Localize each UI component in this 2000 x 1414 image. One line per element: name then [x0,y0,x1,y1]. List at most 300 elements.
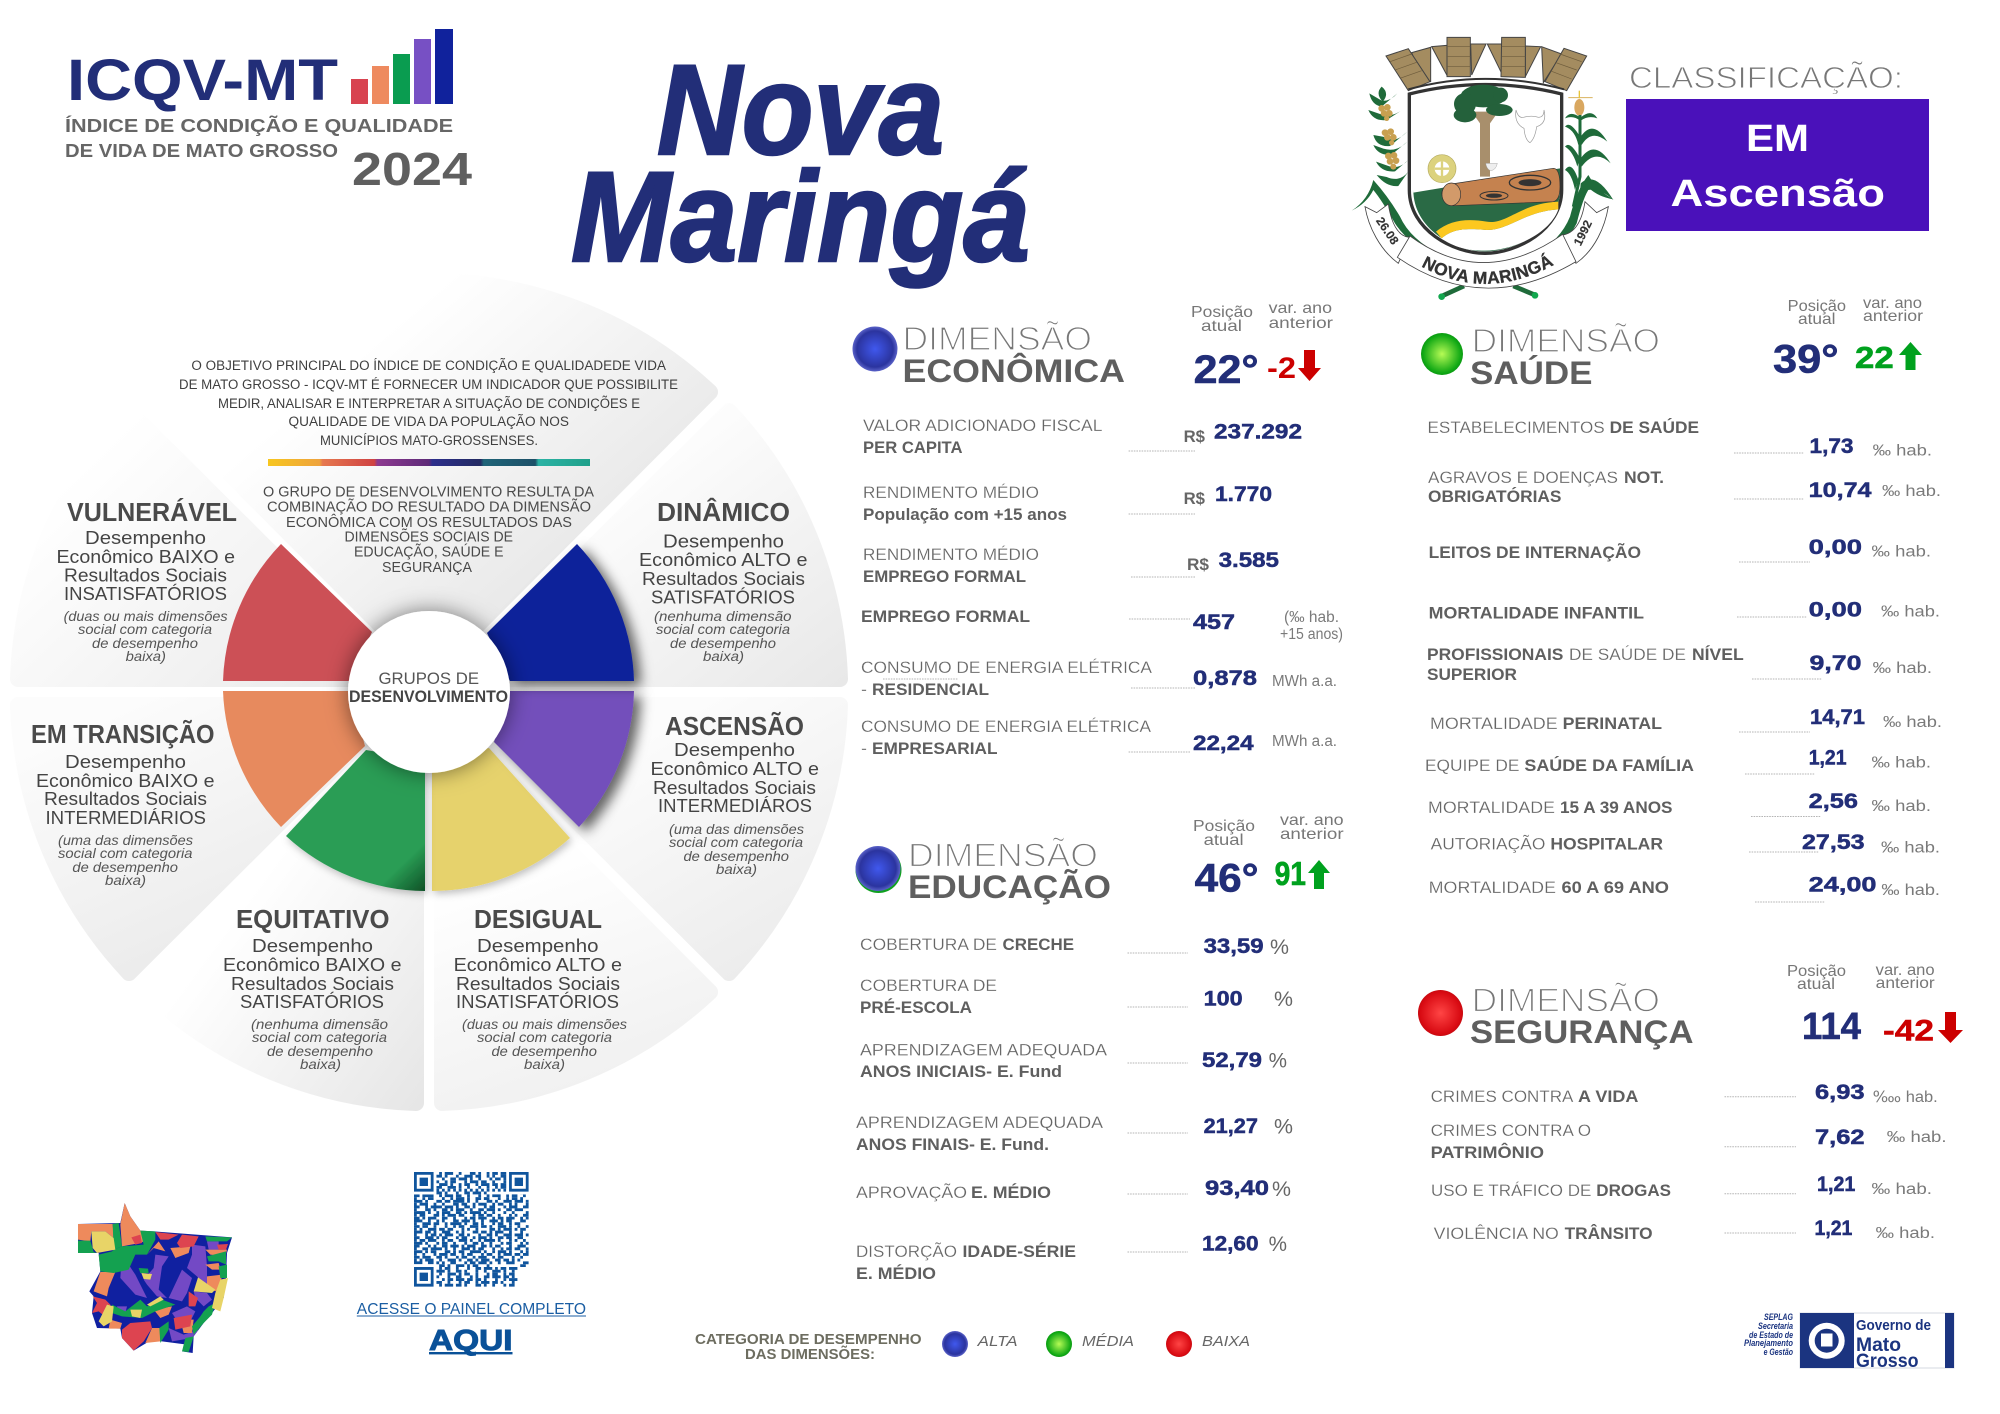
group: Vulnerável [56,498,237,664]
panel: dimensão educação [856,812,1344,1283]
security heading: SEGURANÇA [1470,1014,1694,1050]
rank column header: Posição [1193,818,1255,835]
row: energia empresarial: - [861,740,867,758]
logo bar chart icon [351,29,453,104]
row: pré-escola: % [1274,988,1293,1011]
row: mortalidade 15 a 39: 2,56 [1809,789,1858,813]
arrow: down [1298,350,1321,381]
wheel coloured segments [223,544,634,891]
row: mortalidade 60 a 69 [1429,873,1940,902]
row: estabelecimentos: ‰ hab. [1873,443,1932,460]
row: energia residencial: MWh a.a. [1272,673,1337,690]
crest green swooshes [1352,175,1613,267]
icon: green performance dot [1421,333,1463,375]
row: anos finais: APRENDIZAGEM ADEQUADA [856,1114,1103,1132]
education heading [908,837,1111,905]
row: aprovação: E. MÉDIO [971,1183,1051,1202]
row: drogas: DROGAS [1596,1182,1671,1200]
row: emprego formal [861,608,1343,643]
row: anos iniciais [860,1042,1287,1081]
row: anos finais [856,1114,1293,1154]
group: Vulnerável: Econômico BAIXO e [56,546,235,567]
title: municipality name [571,39,1030,289]
group: Em Transição: social com categoria [58,845,193,861]
crest text: 26.08 [1373,215,1402,247]
row: creche: COBERTURA DE [860,936,997,954]
row: creche: 33,59 [1204,934,1264,958]
legend item: média: MÉDIA [1082,1333,1134,1350]
group: Desigual: DESIGUAL [474,906,602,934]
row: crimes contra o patrimônio: ‰ hab. [1887,1129,1946,1146]
group: Desigual: Econômico ALTO e [454,954,622,975]
row: valor adicionado fiscal: VALOR ADICIONADO FISCAL [863,417,1102,435]
SEPLAG caption: de Estado de [1749,1330,1794,1341]
row: equipe saúde família: EQUIPE DE [1425,757,1519,775]
group: Equitativo: social com categoria [252,1029,387,1045]
row: rendimento médio emprego formal [863,545,1279,586]
QR code [413,1171,529,1287]
row: mortalidade infantil: MORTALIDADE INFANTIL [1429,605,1644,623]
group: Ascensão: Resultados Sociais [653,777,816,798]
economic heading: ECONÔMICA [902,353,1125,389]
row: mortalidade 15 a 39: ‰ hab. [1872,798,1931,815]
row: estabelecimentos: 1,73 [1810,434,1854,458]
rank column header: atual [1201,318,1242,335]
row: rendimento médio população: RENDIMENTO MÉDIO [863,483,1039,502]
row: mortalidade 60 a 69: MORTALIDADE [1429,879,1556,897]
row: trânsito: 1,21 [1814,1216,1852,1240]
rank column header: anterior [1863,308,1924,325]
row: creche [860,934,1289,959]
row: crimes contra a vida [1431,1080,1938,1106]
group: Dinâmico: SATISFATÓRIOS [651,586,795,608]
group: Vulnerável: VULNERÁVEL [67,498,237,527]
group: Dinâmico: Econômico ALTO e [639,549,808,570]
rank column header [1191,300,1334,335]
SEPLAG caption: e Gestão [1764,1347,1793,1358]
classification heading: CLASSIFICAÇÃO: [1629,60,1903,95]
group: Equitativo: baixa) [300,1056,341,1072]
row: drogas [1431,1172,1932,1200]
icon: red performance dot [1418,990,1463,1036]
health heading [1470,322,1660,391]
row: perinatal: MORTALIDADE [1430,715,1558,733]
crest towers [1386,37,1587,91]
government badge: Grosso [1856,1351,1919,1372]
row: estabelecimentos: ESTABELECIMENTOS [1428,419,1605,437]
arrow: up [1308,860,1330,889]
group: Ascensão: baixa) [716,861,757,877]
wheel group explanation text: COMBINAÇÃO DO RESULTADO DA DIMENSÃO [267,498,591,516]
row: valor adicionado fiscal: R$ [1184,427,1206,446]
row: mortalidade 15 a 39: 15 A 39 ANOS [1560,799,1672,817]
title: municipality name: Nova [657,39,944,182]
government badge [1800,1313,1954,1372]
row: emprego formal: EMPREGO FORMAL [861,608,1030,626]
economic heading [902,320,1125,389]
row: crimes contra a vida: 6,93 [1815,1080,1865,1104]
row: crimes contra a vida: CRIMES CONTRA [1431,1088,1573,1106]
health heading: SAÚDE [1470,355,1592,391]
row: creche: % [1270,936,1289,959]
row: distorção [856,1232,1287,1283]
row: autorização hospitalar: AUTORIAÇÃO [1431,834,1546,854]
group: Em Transição: (uma das dimensões [58,832,193,848]
wheel objective text: DE MATO GROSSO - ICQV-MT É FORNECER UM INDICADOR QUE POSSIBILITE [179,377,678,392]
rank column header: atual [1204,832,1244,849]
arrow: up [1899,342,1922,370]
row: equipe saúde família: SAÚDE DA FAMÍLIA [1524,756,1694,775]
arrow: down [1938,1012,1963,1043]
crest gear [1428,155,1456,183]
row: anos iniciais: % [1269,1050,1287,1072]
security variation: -42 [1883,1015,1934,1048]
economic heading: DIMENSÃO [902,320,1092,357]
row: agravos: 10,74 [1809,478,1872,502]
group: Dinâmico: Desempenho [663,530,784,552]
icon: blue performance dot with green rim [856,846,902,893]
group: Em Transição [31,719,214,888]
wheel centre circle: GRUPOS DE [378,670,479,688]
row: agravos: AGRAVOS E DOENÇAS [1428,469,1618,487]
row: energia residencial: - [861,681,867,699]
wheel: development groups [18,281,840,1103]
group: Em Transição: de desempenho [72,859,178,875]
panel: dimensão econômica [852,300,1343,758]
group: Desigual: Resultados Sociais [456,973,620,994]
row: perinatal [1430,705,1942,733]
row: anos iniciais: 52,79 [1202,1048,1262,1072]
row: distorção: % [1269,1233,1287,1256]
link: access full dashboard: AQUI [429,1325,512,1357]
economic variation [1267,350,1321,385]
row: equipe saúde família [1425,746,1931,775]
group: Dinâmico: social com categoria [656,621,790,637]
row: rendimento médio população [863,482,1272,524]
SEPLAG caption [1744,1312,1794,1358]
group: Vulnerável: Desempenho [85,527,206,548]
row: estabelecimentos: DE SAÚDE [1610,418,1699,437]
rank column header: Posição [1787,963,1846,980]
crest corn stalk [1565,91,1613,207]
logo: SEPLAG / Governo de Mato Grosso [1744,1312,1954,1372]
row: emprego formal: +15 anos) [1280,626,1343,643]
row: rendimento médio população: População com +15 anos [863,506,1067,524]
logo subtitle: ÍNDICE DE CONDIÇÃO E QUALIDADE [65,115,453,136]
row: autorização hospitalar: ‰ hab. [1881,839,1940,856]
row: agravos: NOT. [1624,469,1664,487]
row: profissionais [1427,645,1932,684]
row: leitos: 0,00 [1809,535,1862,559]
icon: blue performance dot [852,326,898,372]
crest bull head [1516,110,1545,143]
group: Vulnerável: social com categoria [78,621,212,637]
education heading: DIMENSÃO [908,837,1098,874]
crest text [1373,215,1595,284]
group: Desigual: baixa) [524,1056,565,1072]
row: anos finais: % [1274,1116,1293,1138]
classification block [1626,60,1929,231]
row: mortalidade 15 a 39: MORTALIDADE [1428,799,1555,817]
row: emprego formal: (‰ hab. [1284,609,1339,626]
group: Dinâmico: de desempenho [670,635,776,651]
row: distorção: 12,60 [1202,1232,1259,1256]
row: pré-escola: 100 [1204,987,1243,1011]
row: aprovação: APROVAÇÃO [856,1182,967,1202]
group: Vulnerável: de desempenho [92,635,198,651]
wheel group explanation text: DIMENSÕES SOCIAIS DE [344,528,513,546]
legend item: média [1046,1331,1134,1357]
group: Desigual: (duas ou mais dimensões [462,1016,627,1032]
row: emprego formal: 457 [1193,610,1235,634]
row: crimes contra o patrimônio: PATRIMÔNIO [1431,1143,1544,1162]
wheel group explanation text: ECONÔMICA COM OS RESULTADOS DAS [286,514,572,531]
rank column header: Posição [1788,298,1846,315]
group: Desigual: Desempenho [477,935,598,956]
icon: map of Mato Grosso [78,1203,232,1353]
row: mortalidade 60 a 69: ‰ hab. [1881,882,1940,899]
row: energia empresarial: CONSUMO DE ENERGIA ELÉTRICA [861,717,1151,736]
group: Equitativo: Resultados Sociais [231,973,394,994]
legend item: baixa [1166,1331,1250,1357]
row: pré-escola: PRÉ-ESCOLA [860,998,972,1017]
row: autorização hospitalar: HOSPITALAR [1550,836,1663,854]
legend title: DAS DIMENSÕES: [745,1345,875,1363]
row: profissionais: PROFISSIONAIS [1427,646,1563,664]
rank column header [1787,962,1935,993]
row: aprovação [856,1176,1291,1202]
wheel objective text: QUALIDADE DE VIDA DA POPULAÇÃO NOS [288,414,569,429]
rank column header: Posição [1191,304,1253,321]
row: energia empresarial: 22,24 [1193,731,1254,755]
crest coffee branch [1368,87,1408,186]
row: crimes contra a vida: ‱ hab. [1873,1089,1938,1106]
row: agravos: OBRIGATÓRIAS [1428,487,1562,506]
panel: dimensão segurança [1418,962,1963,1243]
legend title: CATEGORIA DE DESEMPENHO [695,1332,922,1348]
group: Equitativo: Desempenho [252,935,373,956]
logo subtitle [65,115,453,161]
crest crossed branches [1441,286,1537,297]
crest shield [1409,84,1562,253]
row: valor adicionado fiscal [863,417,1302,457]
economic rank: 22° [1194,348,1259,392]
group: Desigual: social com categoria [477,1029,612,1045]
row: valor adicionado fiscal: PER CAPITA [863,439,963,457]
group: Vulnerável: Resultados Sociais [64,564,227,586]
row: valor adicionado fiscal: 237.292 [1214,420,1302,444]
row: trânsito: TRÂNSITO [1565,1224,1653,1243]
group: Ascensão: Econômico ALTO e [650,758,819,779]
SEPLAG caption: SEPLAG [1764,1312,1793,1323]
row: leitos: ‰ hab. [1872,544,1931,560]
row: aprovação: 93,40 [1205,1176,1269,1200]
row: autorização hospitalar: 27,53 [1802,830,1865,854]
row: anos iniciais: ANOS INICIAIS- E. Fund [860,1063,1062,1081]
group: Em Transição: EM TRANSIÇÃO [31,719,214,749]
legend item: alta [942,1331,1018,1357]
row: perinatal: PERINATAL [1563,715,1662,733]
group: Ascensão: INTERMEDIÁROS [658,795,812,816]
wheel objective text [179,358,678,448]
row: mortalidade infantil: 0,00 [1809,598,1862,622]
security heading: DIMENSÃO [1472,982,1660,1019]
health variation: 22 [1855,340,1894,375]
row: profissionais: NÍVEL [1692,645,1744,664]
group: Ascensão: social com categoria [669,834,803,850]
wheel centre circle: DESENVOLVIMENTO [349,688,508,706]
security heading [1470,982,1694,1050]
government badge: Mato [1856,1335,1901,1356]
row: drogas: USO E TRÁFICO DE [1431,1181,1591,1200]
health heading: DIMENSÃO [1472,322,1660,359]
row: equipe saúde família: ‰ hab. [1872,755,1931,772]
group: Equitativo: Econômico BAIXO e [223,954,402,975]
group: Desigual: de desempenho [492,1043,597,1059]
row: rendimento médio população: 1.770 [1215,482,1272,506]
logo wordmark: ICQV-MT [67,48,338,113]
row: leitos [1429,535,1931,562]
row: distorção: DISTORÇÃO [856,1241,957,1261]
row: trânsito [1434,1216,1935,1243]
rank column header: var. ano [1863,295,1922,312]
rank column header: var. ano [1269,300,1332,317]
icon: municipal coat of arms [1352,36,1614,300]
group: Vulnerável: INSATISFATÓRIOS [64,583,227,604]
row: profissionais: 9,70 [1810,651,1862,675]
legend title [695,1332,922,1363]
rank column header: anterior [1876,975,1935,992]
row: creche: CRECHE [1002,936,1074,954]
wheel objective text: MEDIR, ANALISAR E INTERPRETAR A SITUAÇÃO DE CONDIÇÕES E [218,396,640,411]
row: equipe saúde família: 1,21 [1809,746,1847,770]
group: Ascensão: (uma das dimensões [669,821,804,837]
group: Em Transição: Resultados Sociais [44,788,207,809]
row: crimes contra o patrimônio [1431,1122,1946,1162]
crest text: NOVA MARINGÁ [1422,252,1554,284]
row: crimes contra o patrimônio: 7,62 [1815,1125,1865,1149]
logo year: 2024 [352,143,472,195]
group: Equitativo: (nenhuma dimensão [251,1016,388,1032]
government badge: Governo de [1856,1317,1931,1334]
legend: performance categories [695,1331,1250,1363]
classification value [1670,118,1885,215]
health rank: 39° [1773,337,1839,381]
row: energia empresarial: EMPRESARIAL [872,740,998,758]
wheel group explanation text: O GRUPO DE DESENVOLVIMENTO RESULTA DA [263,484,594,500]
row: mortalidade 60 a 69: 24,00 [1809,873,1877,897]
row: pré-escola: COBERTURA DE [860,977,997,995]
rank column header: anterior [1280,826,1344,843]
SEPLAG caption: Secretaria [1758,1321,1793,1332]
row: profissionais: ‰ hab. [1873,660,1932,677]
row: estabelecimentos [1428,418,1932,460]
row: rendimento médio emprego formal: 3.585 [1219,548,1279,572]
row: leitos: LEITOS DE INTERNAÇÃO [1429,542,1641,562]
security variation [1883,1012,1963,1048]
rank column header [1193,812,1344,849]
group: Equitativo: de desempenho [267,1043,373,1059]
rank column header [1788,295,1924,328]
row: profissionais: SUPERIOR [1427,666,1517,684]
education variation: 91 [1275,855,1306,892]
crest log [1442,168,1560,206]
group: Em Transição: Desempenho [65,751,186,772]
classification value: EM [1746,118,1809,160]
title: municipality name: Maringá [571,146,1030,289]
link: access full dashboard [357,1301,586,1357]
group: Dinâmico: Resultados Sociais [642,568,805,589]
rank column header: atual [1797,976,1835,993]
row: rendimento médio população: R$ [1184,489,1206,508]
legend item: baixa: BAIXA [1202,1333,1250,1350]
row: perinatal: 14,71 [1810,705,1865,729]
education variation [1275,855,1330,892]
row: energia empresarial [861,717,1337,758]
rank column header: atual [1798,311,1836,328]
wheel group explanation text: SEGURANÇA [382,560,472,576]
group: Equitativo: SATISFATÓRIOS [240,991,384,1012]
health variation [1855,340,1922,375]
group: Ascensão [650,711,819,877]
row: mortalidade 60 a 69: 60 A 69 ANO [1562,879,1669,897]
rank column header: anterior [1269,315,1334,332]
group: Dinâmico [639,497,808,664]
row: rendimento médio emprego formal: RENDIMENTO MÉDIO [863,545,1039,564]
wheel centre circle [348,611,510,773]
group: Em Transição: INTERMEDIÁRIOS [46,807,206,828]
row: agravos [1428,469,1941,506]
group: Dinâmico: baixa) [703,648,744,664]
row: mortalidade 15 a 39 [1428,789,1931,817]
row: energia empresarial: MWh a.a. [1272,733,1337,750]
wheel colour bar [268,459,590,466]
SEPLAG caption: Planejamento [1744,1338,1793,1349]
row: energia residencial: RESIDENCIAL [872,681,989,699]
row: distorção: E. MÉDIO [856,1264,936,1283]
panel: dimensão saúde [1421,295,1942,902]
row: energia residencial: CONSUMO DE ENERGIA ELÉTRICA [861,658,1152,677]
row: agravos: ‰ hab. [1882,483,1941,500]
row: anos finais: ANOS FINAIS- E. Fund. [856,1136,1049,1154]
group: Dinâmico: (nenhuma dimensão [654,608,792,624]
group: Desigual: INSATISFATÓRIOS [456,991,619,1012]
group: Desigual [454,906,627,1072]
row: crimes contra o patrimônio: CRIMES CONTRA O [1431,1122,1591,1140]
group: Vulnerável: baixa) [126,648,166,664]
group: Em Transição: baixa) [105,872,146,888]
row: distorção: IDADE-SÉRIE [962,1242,1076,1261]
group: Ascensão: ASCENSÃO [665,711,804,741]
row: mortalidade infantil: ‰ hab. [1881,604,1940,620]
row: crimes contra a vida: A VIDA [1578,1088,1638,1106]
group: Ascensão: de desempenho [684,848,789,864]
row: anos finais: 21,27 [1204,1114,1258,1138]
classification box [1626,99,1929,231]
education heading: EDUCAÇÃO [908,869,1111,905]
security rank: 114 [1802,1006,1861,1048]
crest tree [1454,85,1513,177]
group: Em Transição: Econômico BAIXO e [36,770,214,791]
group: Ascensão: Desempenho [674,739,795,760]
crest text: 1992 [1571,218,1595,248]
education rank: 46° [1195,857,1259,901]
row: energia residencial [861,658,1337,699]
group: Equitativo: EQUITATIVO [236,906,390,934]
row: trânsito: VIOLÊNCIA NO [1434,1224,1559,1243]
logo: ICQV-MT 2024 [65,29,472,195]
legend item: alta: ALTA [977,1333,1018,1350]
